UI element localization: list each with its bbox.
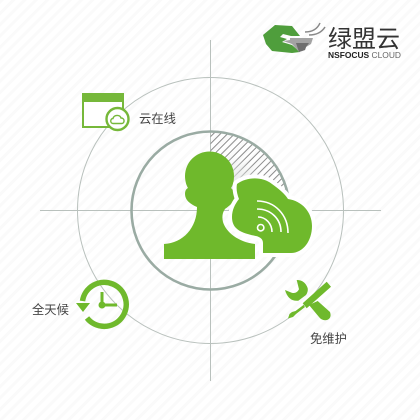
inner ring [132,132,290,290]
icon: tools [285,280,331,320]
label: 免维护: 免维护 [310,331,347,346]
icon: person [164,152,255,259]
hatched quadrant [210,132,290,210]
label: 云在线: 云在线 [139,112,176,126]
icon: browser window with cloud [82,93,128,130]
icon: clock [76,282,126,326]
label: 全天候: 全天候 [32,302,69,317]
logo mark [263,23,325,53]
logo [263,23,401,60]
icon: wifi cloud [232,178,312,253]
logo subtitle: NSFOCUS CLOUD [328,50,401,60]
logo wordmark: 绿盟云 [328,26,400,53]
